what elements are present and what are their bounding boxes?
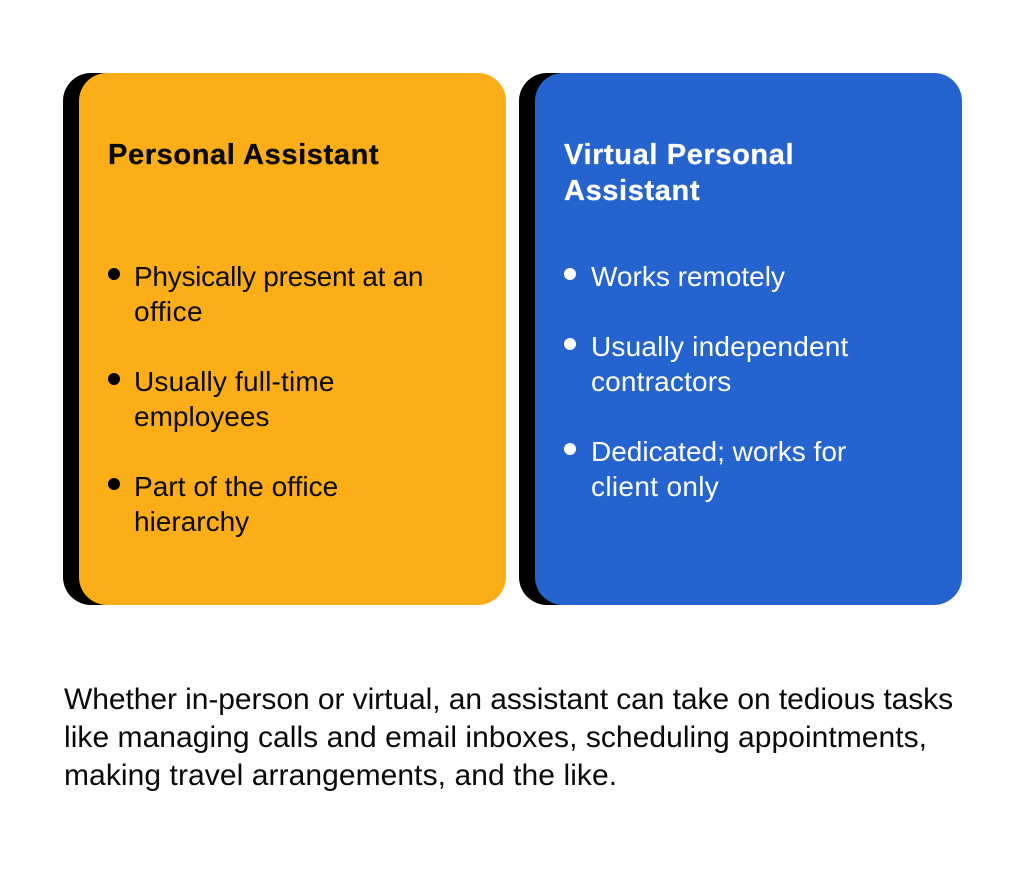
text block: closing paragraph: Whether in-person or virtual, an assistant can take on tedious tasks [64, 683, 953, 716]
panel shadow [519, 73, 639, 605]
text block: closing paragraph [64, 683, 953, 792]
panel shadow [63, 73, 183, 605]
bullet: contractors: contractors [591, 366, 731, 397]
panel background [79, 73, 506, 605]
heading: personal assistant: Personal Assistant [108, 139, 379, 171]
bullet: full-time: employees [134, 401, 269, 432]
bullet: physically present: Physically present at an [134, 261, 423, 292]
panel background [535, 73, 962, 605]
text block: closing paragraph: like managing calls and email inboxes, scheduling appointments, [64, 721, 927, 754]
panel: virtual personal assistant [519, 73, 962, 605]
text block: closing paragraph: making travel arrangements, and the like. [64, 759, 617, 792]
bullet: dedicated [564, 436, 846, 502]
bullet: dedicated: Dedicated; works for [591, 436, 846, 467]
heading: virtual personal assistant: Virtual Personal [564, 139, 794, 171]
heading: virtual personal assistant [564, 139, 794, 207]
bullet: hierarchy: Part of the office [134, 471, 338, 502]
bullet: contractors: Usually independent [591, 331, 849, 362]
bullet: physically present: office [134, 296, 203, 327]
panel: personal assistant [63, 73, 506, 605]
bullet: contractors [564, 331, 849, 397]
bullet: hierarchy [108, 471, 338, 537]
bullet: full-time: Usually full-time [134, 366, 335, 397]
bullet: dedicated: client only [591, 471, 719, 502]
bullet: full-time [108, 366, 335, 432]
bullet: physically present [108, 261, 423, 327]
heading: virtual personal assistant: Assistant [564, 175, 700, 207]
bullet: hierarchy: hierarchy [134, 506, 249, 537]
bullet: remote: Works remotely [591, 261, 785, 292]
